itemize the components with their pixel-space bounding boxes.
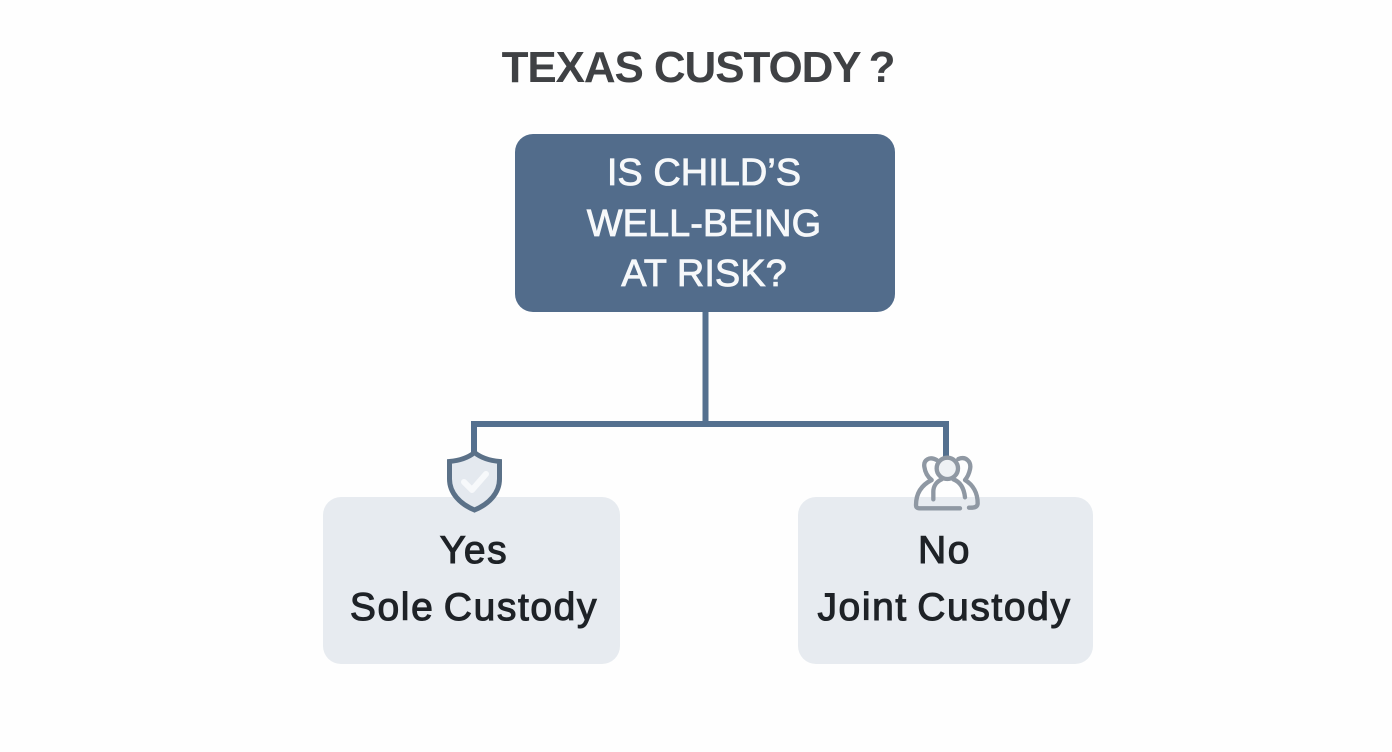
question text [586,152,821,295]
panel: no outcome [798,497,1093,664]
question text: AT RISK? [621,253,787,295]
yes outcome text: Sole Custody [350,586,598,629]
no outcome text: No [918,529,971,572]
question text: WELL-BEING [587,202,821,244]
icon: group of people [914,456,980,510]
no outcome text [817,529,1072,629]
title: TEXAS CUSTODY ? [502,43,894,92]
icon: shield with check [447,451,502,513]
yes outcome text [350,529,598,629]
yes outcome text: Yes [440,529,508,572]
no outcome text: Joint Custody [817,586,1072,629]
panel: question box [515,134,895,312]
question text: IS CHILD’S [607,152,801,194]
panel: yes outcome [323,497,620,664]
